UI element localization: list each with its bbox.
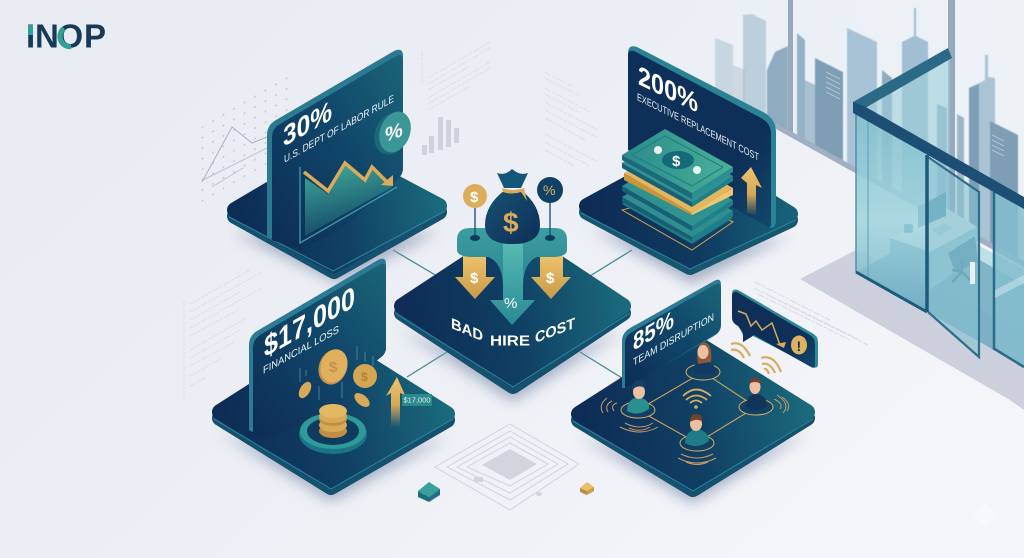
- platform shadows: [218, 228, 810, 504]
- card: 200% Executive Replacement Cost: [581, 46, 796, 269]
- left glass wall: [856, 113, 927, 310]
- person bottom: [685, 414, 709, 446]
- percent badge: %: [385, 118, 403, 147]
- platform: [229, 151, 445, 271]
- platform: [214, 341, 453, 489]
- card: 85% Team Disruption: [573, 280, 818, 491]
- percent coin: %: [543, 182, 555, 198]
- funnel: %: [504, 295, 517, 312]
- dollar coin: [463, 184, 487, 208]
- money bag: $: [503, 207, 519, 238]
- platform: [573, 341, 813, 491]
- gold arrow left: [455, 256, 495, 299]
- funnel: [457, 228, 567, 325]
- central wifi: [683, 390, 711, 409]
- gold arrow right: [531, 256, 571, 299]
- percent coin: [537, 177, 563, 203]
- panel: [267, 50, 403, 238]
- cash stack: $: [672, 153, 681, 170]
- top frame front: [853, 102, 1024, 209]
- up arrow: [386, 377, 405, 427]
- gold cube: [580, 482, 594, 495]
- base frame: [856, 272, 927, 312]
- up arrow: [741, 167, 762, 216]
- door: [928, 157, 979, 357]
- connector lines: [393, 250, 632, 378]
- title text: HIRE: [490, 332, 530, 350]
- platform: [581, 151, 796, 269]
- pins: [470, 203, 555, 241]
- value: $17,000: [264, 279, 355, 364]
- window sill: [776, 123, 1024, 267]
- value tag: $17,000: [404, 396, 430, 404]
- signal waves: [601, 395, 789, 464]
- platform: [395, 233, 630, 387]
- title text: BAD: [451, 316, 483, 345]
- network rings: [621, 364, 773, 451]
- card: 30% U.S. Dept of Labor Rule: [229, 50, 445, 271]
- gold outline: [622, 195, 733, 250]
- value: 200%: [638, 60, 698, 119]
- percent badge: [369, 107, 416, 159]
- logo: INOP: [26, 18, 106, 54]
- title text: [451, 315, 575, 350]
- falling coins: $: [361, 370, 368, 384]
- panel: [622, 280, 721, 388]
- circuit maze decoration: [435, 424, 579, 510]
- label: U.S. DEPT OF LABOR RULE: [284, 93, 394, 166]
- panel: [249, 259, 386, 432]
- value tag: [402, 394, 432, 406]
- desk: [890, 192, 978, 290]
- central card: Bad Hire Cost: [395, 169, 630, 387]
- gold wifi signals: [731, 343, 781, 374]
- top frame back: [853, 48, 952, 110]
- office window with skyline: [714, 0, 1019, 258]
- cash stack: [622, 129, 733, 244]
- glass office room: [853, 48, 1024, 367]
- person top: [693, 342, 715, 375]
- gold arrow right: $: [546, 270, 555, 287]
- card: $17,000 Financial Loss: [214, 259, 453, 489]
- title text: COST: [535, 315, 575, 347]
- window mullions: [788, 0, 955, 213]
- gold arrow left: $: [470, 270, 479, 287]
- building window lines: [826, 72, 1004, 156]
- falling coins: $: [329, 359, 338, 376]
- value: 85%: [633, 304, 674, 357]
- teal cube: [418, 482, 440, 502]
- faint bar chart: [422, 117, 459, 155]
- falling coins: [296, 345, 377, 410]
- back glass: [856, 54, 1024, 367]
- person right: [746, 378, 767, 410]
- faint text lines right: [754, 282, 868, 345]
- room floor: [856, 232, 1024, 367]
- skyline buildings: [714, 8, 1019, 258]
- chat callout: [732, 290, 818, 368]
- faint dot grid and line chart: [200, 70, 294, 205]
- money bag: [485, 169, 540, 244]
- right glass panel: [993, 192, 1024, 367]
- floor shadow of glass room: [800, 250, 1024, 410]
- network lines: [638, 372, 756, 443]
- faint text lines left: [184, 270, 262, 398]
- label: TEAM DISRUPTION: [633, 311, 714, 369]
- bottom-right sparkle: [973, 503, 997, 527]
- dollar coin: $: [470, 189, 479, 206]
- ring and coin stack: [299, 404, 367, 454]
- faint text lines top: [422, 42, 598, 166]
- person left: [627, 380, 649, 414]
- label: FINANCIAL LOSS: [263, 324, 339, 377]
- label: EXECUTIVE REPLACEMENT COST: [637, 92, 759, 164]
- chat callout: !: [796, 338, 801, 354]
- value: 30%: [283, 95, 332, 153]
- chart: [300, 163, 397, 243]
- panel: [628, 46, 776, 228]
